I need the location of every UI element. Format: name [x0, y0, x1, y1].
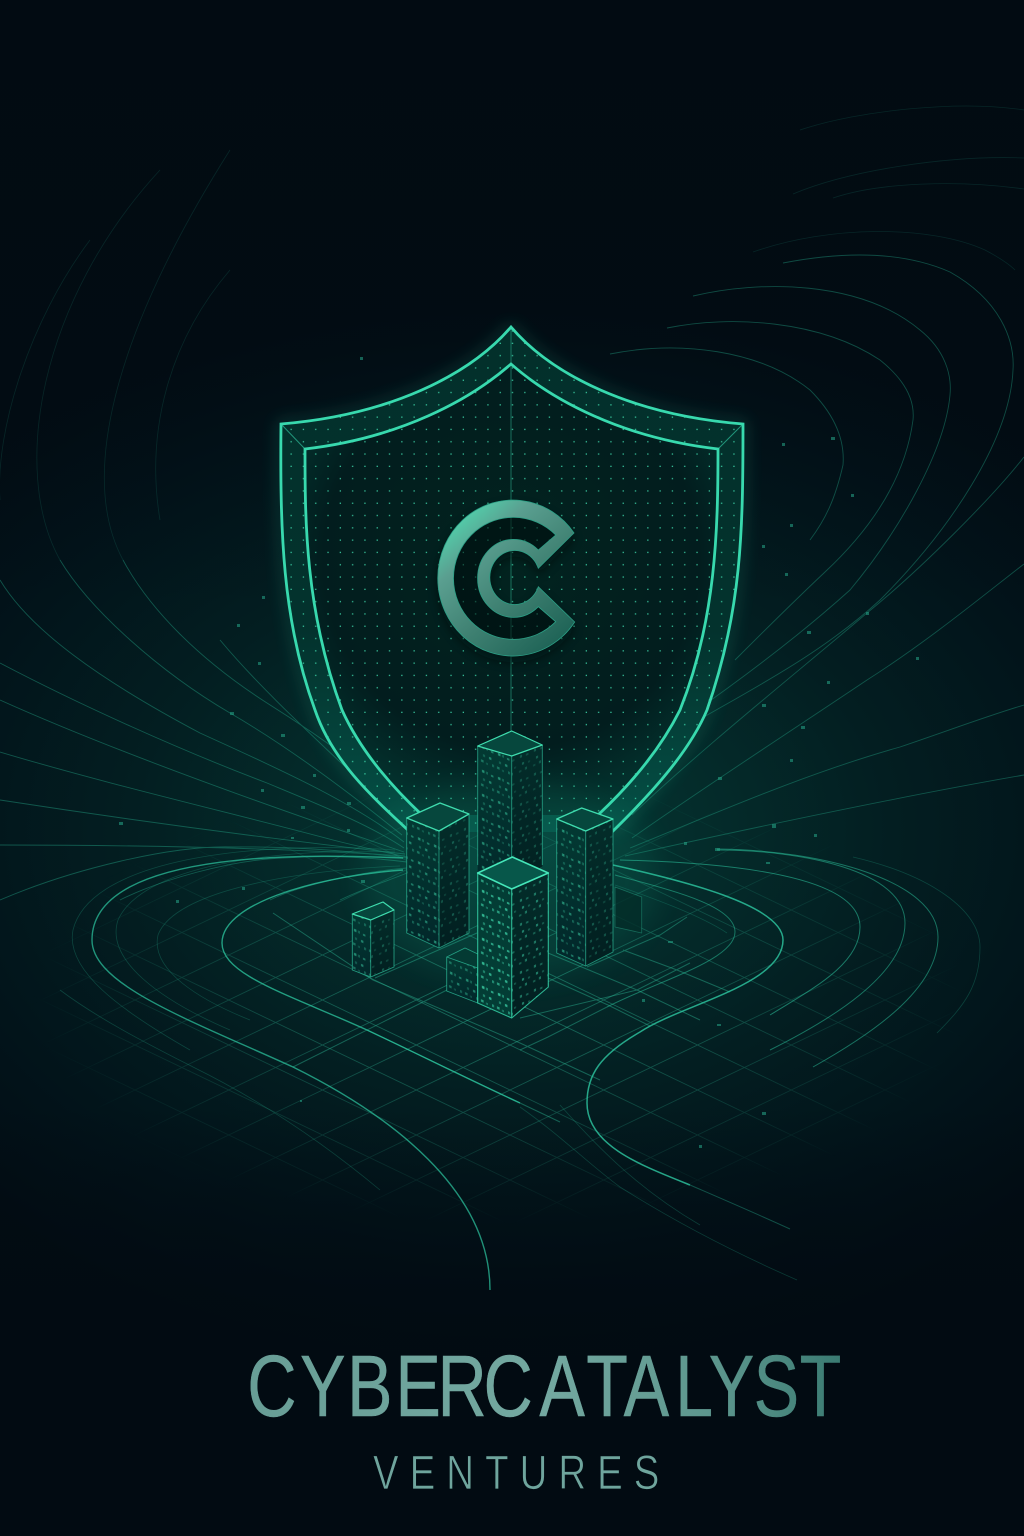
logo C shadow	[438, 506, 575, 662]
building: small left	[352, 902, 394, 977]
flow lines: left fan	[0, 560, 407, 900]
curve: S right	[587, 865, 783, 1185]
center seam	[510, 327, 512, 740]
outer outline	[281, 327, 743, 832]
curve: right third	[717, 850, 905, 1050]
buildings	[352, 731, 642, 1018]
building: left tower	[407, 803, 469, 948]
building: front center tower	[478, 857, 548, 1018]
flow lines: right swirls	[610, 255, 1024, 856]
ground major lines	[273, 913, 730, 1122]
title: CYBERCATALYST	[247, 1337, 841, 1435]
building: small back right	[615, 887, 642, 933]
bevel corners	[281, 424, 743, 449]
flow lines: left upper swoops	[0, 150, 230, 560]
building: back center tower	[478, 731, 542, 900]
faint rings	[60, 848, 980, 1280]
curve: long left	[92, 856, 490, 1290]
particles	[119, 357, 919, 1148]
curve: small right	[607, 875, 735, 1007]
curve: S right tail	[690, 1185, 790, 1229]
subtitle: VENTURES	[373, 1447, 659, 1500]
shield body	[281, 327, 743, 832]
dot grid	[281, 327, 743, 832]
bright flow curves	[92, 849, 938, 1290]
flow lines: right upper arcs	[753, 106, 1024, 270]
shield	[281, 327, 743, 832]
curve: right second	[620, 860, 860, 1015]
shield inner panel	[305, 364, 718, 815]
inner outline	[305, 364, 718, 815]
curve: right fourth	[717, 849, 938, 1067]
curve: inner left	[222, 870, 520, 1103]
buildings glow	[360, 780, 660, 980]
ground grid	[74, 814, 926, 1206]
shield glow	[281, 327, 743, 832]
building: right tower	[557, 808, 613, 966]
building: small center	[447, 948, 480, 1003]
logo C	[438, 500, 575, 656]
